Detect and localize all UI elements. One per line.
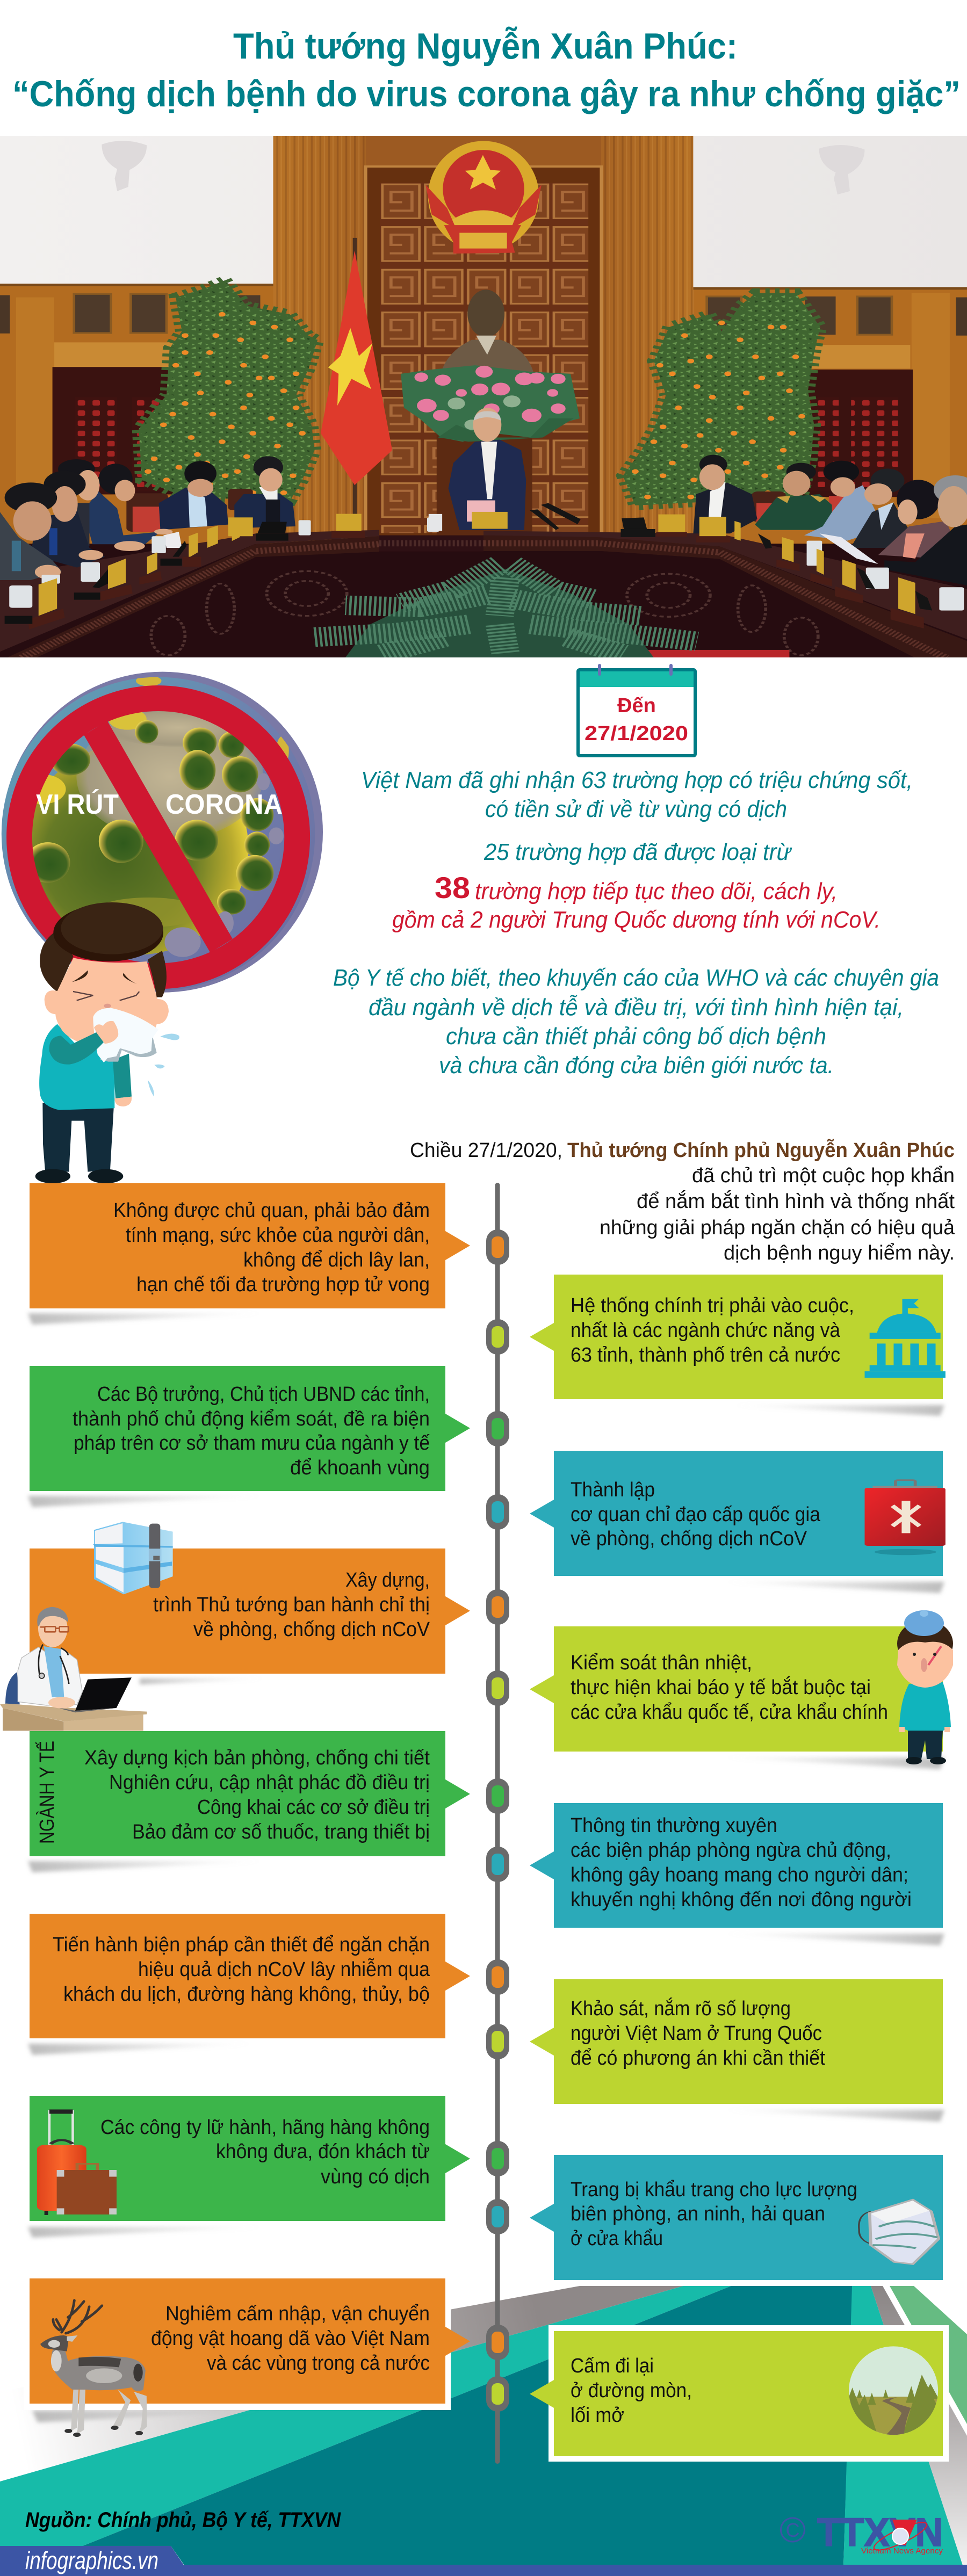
panel: right step 1 lime: nhất là các ngành chức năng và (571, 1319, 841, 1342)
nameplate bases (656, 532, 924, 628)
panel: right step 6 teal: biên phòng, an ninh, hải quan (571, 2203, 825, 2225)
panel: right step 1 lime: 63 tỉnh, thành phố trên cả nước (571, 1344, 840, 1366)
delegate K (878, 480, 952, 559)
left sleeve (49, 1032, 104, 1065)
panel: right step 4 teal: các biện pháp phòng ngừa chủ động, (571, 1839, 891, 1862)
panel: left step 2 green: pháp trên cơ sở tham mưu của ngành y tế (74, 1432, 430, 1455)
droplets (148, 1034, 179, 1097)
panel: left step 5 orange: Tiến hành biện pháp cần thiết để ngăn chặn (53, 1934, 430, 1956)
face (38, 1610, 68, 1647)
laptops and microphones (530, 503, 932, 611)
panel: right step 7 lime: lối mở (571, 2404, 624, 2427)
delegate J (850, 468, 909, 548)
hands (35, 529, 172, 579)
text block: case statistics: 38 (435, 871, 470, 905)
closed eyes (73, 992, 139, 1001)
nameplate bases (28, 531, 365, 629)
tissue (93, 1008, 158, 1062)
delegate A (0, 482, 62, 580)
speaker: prime minister (429, 408, 526, 531)
cups (9, 517, 439, 608)
panel: left step 4 green: Xây dựng kịch bản phòng, chống chi tiết (84, 1747, 430, 1769)
nameplates (39, 514, 362, 616)
illustration: boy with thermometer (897, 1610, 953, 1764)
panel: left step 7 orange: Nghiêm cấm nhập, vận chuyển (165, 2303, 430, 2325)
flower arrangement (401, 365, 580, 442)
panel: left step 1 orange: không để dịch lây lan, (243, 1249, 430, 1271)
panel: left step 4 green: Nghiên cứu, cập nhật phác đồ điều trị (109, 1771, 430, 1794)
panel: left step 6 green: không đưa, đón khách từ (216, 2140, 430, 2163)
icon: government building (864, 1299, 946, 1378)
panel: left step 3 orange: trình Thủ tướng ban hành chỉ thị (153, 1594, 430, 1616)
text block: meeting intro: đã chủ trì một cuộc họp khẩn (692, 1164, 955, 1187)
panel: right step 3 lime: các cửa khẩu quốc tế, cửa khẩu chính (571, 1701, 888, 1724)
icon: first aid kit (864, 1480, 946, 1555)
right hair (148, 951, 167, 997)
panel: left step 2 green: để khoanh vùng (290, 1457, 430, 1479)
delegate F (234, 456, 295, 528)
head (40, 2335, 69, 2351)
panel: left step 5 orange: khách du lịch, đường hàng không, thủy, bộ (63, 1983, 430, 2006)
chairs (126, 489, 253, 532)
panel: left step 4 green (30, 1731, 470, 1856)
delegate G (693, 455, 757, 533)
panel: right step 2 teal: cơ quan chỉ đạo cấp quốc gia (571, 1503, 821, 1526)
panel: right step 7 lime (530, 2331, 943, 2456)
illustration: face mask (859, 2199, 939, 2264)
tree: left kumquat (139, 280, 317, 501)
conference table right with delegates (484, 455, 967, 658)
footer background shapes (0, 2286, 967, 2576)
hooves (64, 2426, 143, 2437)
icon: left wall lamp (102, 141, 147, 191)
text block: case statistics: chưa cần thiết phải công bố dịch bệnh (446, 1023, 826, 1050)
panel: left step 1 orange (30, 1183, 470, 1308)
panel: left step 3 orange: Xây dựng, (345, 1569, 430, 1591)
text block: case statistics: gồm cả 2 người Trung Quốc dương tính với nCoV. (392, 907, 881, 933)
body (52, 2349, 146, 2391)
delegate C (58, 459, 99, 546)
calendar: Đến (617, 694, 656, 717)
panel: left step 1 orange: hạn chế tối đa trường hợp tử vong (136, 1273, 430, 1296)
text block: case statistics: có tiền sử đi về từ vùng có dịch (485, 796, 787, 822)
sign label: CORONA: CORONA (165, 789, 283, 820)
conference table left with delegates (0, 456, 484, 658)
cups (807, 541, 964, 611)
hand (94, 1021, 118, 1044)
panel: right step 5 lime: Khảo sát, nắm rõ số lượng (571, 1997, 791, 2020)
text block: meeting intro: những giải pháp ngăn chặn có hiệu quả (600, 1217, 955, 1239)
papers (820, 533, 878, 564)
text block: meeting intro: dịch bệnh nguy hiểm này. (724, 1242, 955, 1264)
timeline nodes (486, 1229, 509, 2412)
right hand (114, 1097, 132, 1106)
coat (18, 1647, 82, 1705)
panel: right step 2 teal: Thành lập (571, 1479, 655, 1501)
white frame: orange box 7 (24, 2273, 451, 2410)
legs (69, 2390, 147, 2435)
laptop (55, 1677, 132, 1712)
source note: Nguồn: Chính phủ, Bộ Y tế, TTXVN (25, 2508, 341, 2532)
text block: case statistics: trường hợp tiếp tục theo dõi, cách ly, (475, 878, 838, 905)
TTXVN logo: C (785, 2519, 799, 2541)
TTXVN logo: Vietnam News Agency (861, 2546, 943, 2556)
icon: right wall lamp (819, 145, 864, 194)
stethoscope end (39, 1673, 45, 1678)
text block: case statistics: và chưa cần đóng cửa biên giới nước ta. (439, 1052, 834, 1079)
panel: left step 7 orange: và các vùng trong cả nước (207, 2352, 430, 2375)
panel: right step 4 teal: Thông tin thường xuyên (571, 1814, 777, 1837)
panel: left step 2 green: thành phố chủ động kiểm soát, đề ra biện (73, 1408, 430, 1430)
icon: national flag (321, 238, 392, 518)
scrubs (44, 1646, 64, 1697)
panel: right step 5 lime: người Việt Nam ở Trung Quốc (571, 2022, 822, 2045)
panel: left step 3 orange (30, 1549, 470, 1674)
panel: right step 7 lime: ở đường mòn, (571, 2379, 692, 2402)
pants (42, 1103, 114, 1172)
back hair (40, 933, 74, 992)
hair top (53, 904, 163, 961)
panel: right step 1 lime: Hệ thống chính trị phải vào cuộc, (571, 1294, 854, 1317)
laptops and microphones (5, 522, 288, 624)
panel: right step 5 lime: để có phương án khi cần thiết (571, 2047, 825, 2070)
box shadows (28, 1313, 944, 2422)
panel: right step 4 teal: khuyến nghị không đến nơi đông người (571, 1888, 912, 1911)
title: Thủ tướng Nguyễn Xuân Phúc: (233, 26, 738, 67)
panel: right step 4 teal (530, 1803, 943, 1928)
white frame: lime box 7 (549, 2325, 949, 2462)
panel: right step 2 teal (530, 1451, 943, 1576)
text block: meeting intro: để nắm bắt tình hình và thống nhất (637, 1190, 955, 1213)
hair (37, 1607, 68, 1626)
text block: case statistics: đầu ngành về dịch tễ và điều trị, với tình hình hiện tại, (369, 994, 904, 1021)
fern plant (314, 565, 789, 657)
shoes (35, 1169, 123, 1183)
bust statue (443, 290, 533, 372)
panel: right step 6 teal: ở cửa khẩu (571, 2227, 663, 2250)
delegate E (159, 461, 228, 530)
panel: left step 2 green (30, 1366, 470, 1491)
TTXVN logo: TTXVN (817, 2510, 943, 2555)
panel: left step 7 orange (30, 2278, 470, 2404)
calendar: 27/1/2020 (584, 722, 688, 745)
title (12, 26, 961, 114)
panel: virus prohibition sign (0, 672, 323, 993)
panel: left step 4 green: Công khai các cơ sở điều trị (197, 1796, 430, 1819)
panel: right step 6 teal: Trang bị khẩu trang cho lực lượng (571, 2179, 857, 2201)
panel: right step 6 teal (530, 2155, 943, 2280)
delegate H military (755, 463, 832, 530)
delegate I (804, 461, 875, 541)
hands (48, 1697, 75, 1709)
panel: left step 6 green: vùng có dịch (321, 2166, 430, 2188)
panel: right step 3 lime: Kiểm soát thân nhiệt, (571, 1652, 752, 1674)
panel: right step 4 teal: không gây hoang mang cho người dân; (571, 1864, 908, 1886)
antlers (53, 2300, 102, 2333)
illustration: sneezing man (35, 902, 179, 1183)
delegate B (31, 471, 105, 568)
nameplates (484, 512, 915, 614)
panel: left step 6 green (30, 2096, 470, 2221)
text block: case statistics: Việt Nam đã ghi nhận 63 trường hợp có triệu chứng sốt, (361, 767, 913, 793)
panel: left step 5 orange: hiệu quả dịch nCoV lây nhiễm qua (138, 1958, 430, 1981)
panel: right step 3 lime: thực hiện khai báo y tế bắt buộc tại (571, 1676, 871, 1699)
calendar (578, 664, 695, 756)
illustration: forest path badge (848, 2346, 940, 2435)
text block: case statistics (333, 767, 939, 1079)
paper (163, 532, 182, 548)
glasses (40, 1626, 68, 1632)
panel: right step 1 lime (530, 1275, 943, 1399)
timeline axis (495, 1183, 500, 2464)
chair (5, 1672, 20, 1704)
panel: left step 6 green: Các công ty lữ hành, hãng hàng không (100, 2116, 430, 2139)
panel: right step 5 lime (530, 1979, 943, 2104)
panel: left step 4 green: Bảo đảm cơ số thuốc, trang thiết bị (132, 1821, 430, 1843)
illustration: stacked books (93, 1522, 173, 1594)
sweater (39, 1024, 114, 1110)
sign label: VI RÚT: VI RÚT (36, 789, 119, 820)
right sleeve (113, 1054, 132, 1098)
eyebrows (72, 971, 139, 985)
text block: case statistics: 25 trường hợp đã được loại trừ (484, 839, 792, 865)
text block: meeting intro (410, 1138, 955, 1264)
chairs (752, 491, 845, 525)
icon: national emblem (425, 141, 542, 254)
panel: left step 4 green: NGÀNH Y TẾ (35, 1741, 59, 1844)
website tab text: infographics.vn (25, 2546, 158, 2574)
text block: meeting intro: Thủ tướng Chính phủ Nguyễn Xuân Phúc (567, 1138, 955, 1162)
stethoscope (39, 1645, 69, 1684)
illustration: deer (40, 2300, 147, 2437)
delegate D (89, 464, 158, 545)
panel: left step 3 orange: về phòng, chống dịch nCoV (193, 1618, 430, 1641)
illustration: suitcases (37, 2109, 117, 2215)
panel: right step 7 lime: Cấm đi lại (571, 2355, 654, 2377)
tissue shadow (100, 1035, 157, 1062)
face (45, 958, 169, 1047)
panel: left step 1 orange: Không được chủ quan, phải bảo đảm (113, 1199, 430, 1222)
delegate L (884, 475, 967, 585)
white frame: teal box 6 (549, 2277, 949, 2286)
ear (67, 2335, 77, 2342)
panel: right step 2 teal: về phòng, chống dịch nCoV (571, 1528, 807, 1550)
panel: left step 5 orange (30, 1914, 470, 2038)
panel: right step 3 lime (530, 1626, 943, 1752)
tree: right kumquat (623, 293, 820, 505)
desk (0, 1704, 147, 1721)
panel: left step 7 orange: động vật hoang dã vào Việt Nam (151, 2327, 430, 2350)
photo: government meeting room (0, 136, 967, 659)
panel: left step 2 green: Các Bộ trưởng, Chủ tịch UBND các tỉnh, (97, 1383, 430, 1406)
panel: left step 1 orange: tính mạng, sức khỏe của người dân, (126, 1224, 430, 1247)
text block: meeting intro: Chiều 27/1/2020, (410, 1139, 562, 1162)
illustration: doctor at laptop (0, 1607, 147, 1731)
nose (104, 1004, 111, 1008)
